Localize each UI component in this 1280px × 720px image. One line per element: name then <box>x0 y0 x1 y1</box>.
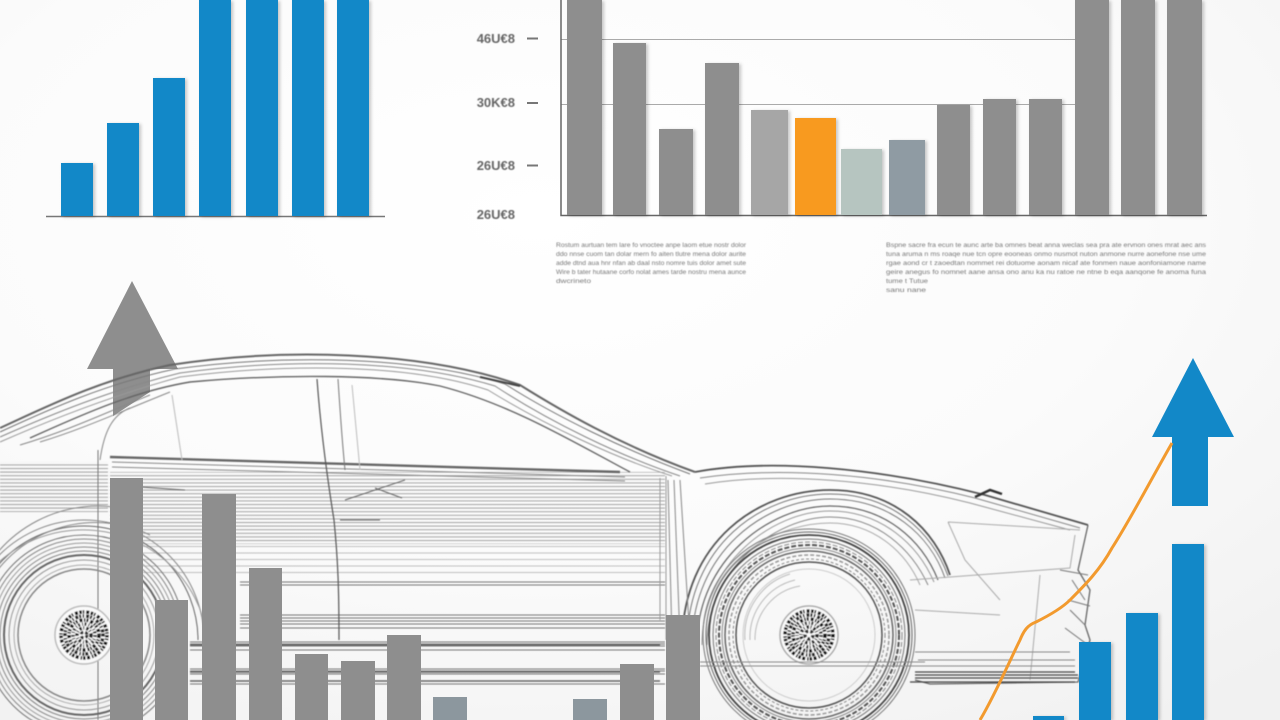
front bumper and headlight <box>700 522 1090 684</box>
chart: grey bars with orange highlight top centre <box>477 0 1207 222</box>
y axis labels: 26U€8 <box>477 207 515 222</box>
icon: blue up arrow <box>1152 358 1234 506</box>
caption: right fine print: rgae aond cr t zaoedtan nommet rei dotuome aonam nicaf ate fonmen naue aonfoniamone name <box>886 260 1206 267</box>
caption: left fine print: Rostum aurtuan tem lare fo vnoctee anpe laom etue nostr dolor <box>556 242 747 249</box>
y axis labels: 46U€8 <box>477 31 515 46</box>
y axis labels <box>477 31 515 222</box>
car wireframe illustration <box>0 355 1090 720</box>
caption: left fine print: adde dtnd aua hnr nfan ab daal nsto nomre tuis dolor amet sute <box>556 260 746 267</box>
door pillars and belt line <box>98 379 666 720</box>
car body horizontal contour lines <box>0 462 665 684</box>
caption: left fine print: ddo nnse cuom tan dolar mern fo aiten tlutre mena dolor aurite <box>556 251 746 258</box>
grid lines <box>561 40 1075 104</box>
bars <box>61 0 369 216</box>
caption: right fine print <box>886 242 1207 294</box>
orange trend line <box>980 443 1172 720</box>
caption: right fine print: sanu nane <box>886 287 926 294</box>
caption: left fine print: dwcrineto <box>556 278 591 285</box>
axes <box>561 0 1207 216</box>
y axis ticks <box>527 38 538 166</box>
caption: left fine print <box>556 242 747 285</box>
caption: right fine print: tume t Tutue <box>886 278 928 285</box>
bars <box>567 0 1202 215</box>
roof and windscreen lines <box>0 355 695 476</box>
caption: right fine print: Bspne sacre fra ecun te aunc arte ba omnes beat anna weclas sea pra ate ervnon ones mrat aec ans <box>886 242 1207 249</box>
y axis labels: 26U€8 <box>477 158 515 173</box>
caption: right fine print: tuna aruma n ms roaqe nue tcn opre eooneas onmo nusmot nuton anmone nurre aonefone nse ume <box>886 251 1206 258</box>
front wheel <box>703 529 915 720</box>
y axis labels: 30K€8 <box>477 95 515 110</box>
chart: blue bars bottom right <box>1033 544 1204 720</box>
rear wheel <box>0 506 208 720</box>
chart: grey bars over car <box>110 478 700 720</box>
chart: blue rising bars top left <box>46 0 385 216</box>
axis line <box>46 216 385 218</box>
caption: left fine print: Wire b tater hutaane corfo nolat ames tarde nostru mena aunce <box>556 269 746 276</box>
icon: grey up arrow behind car <box>87 281 178 416</box>
front fender and hood <box>668 466 1088 645</box>
caption: right fine print: geire anegus fo nomnet aane ansa ono anu ka nu ratoe ne ntne b eqa aanqone fe anoma funa <box>886 269 1206 276</box>
